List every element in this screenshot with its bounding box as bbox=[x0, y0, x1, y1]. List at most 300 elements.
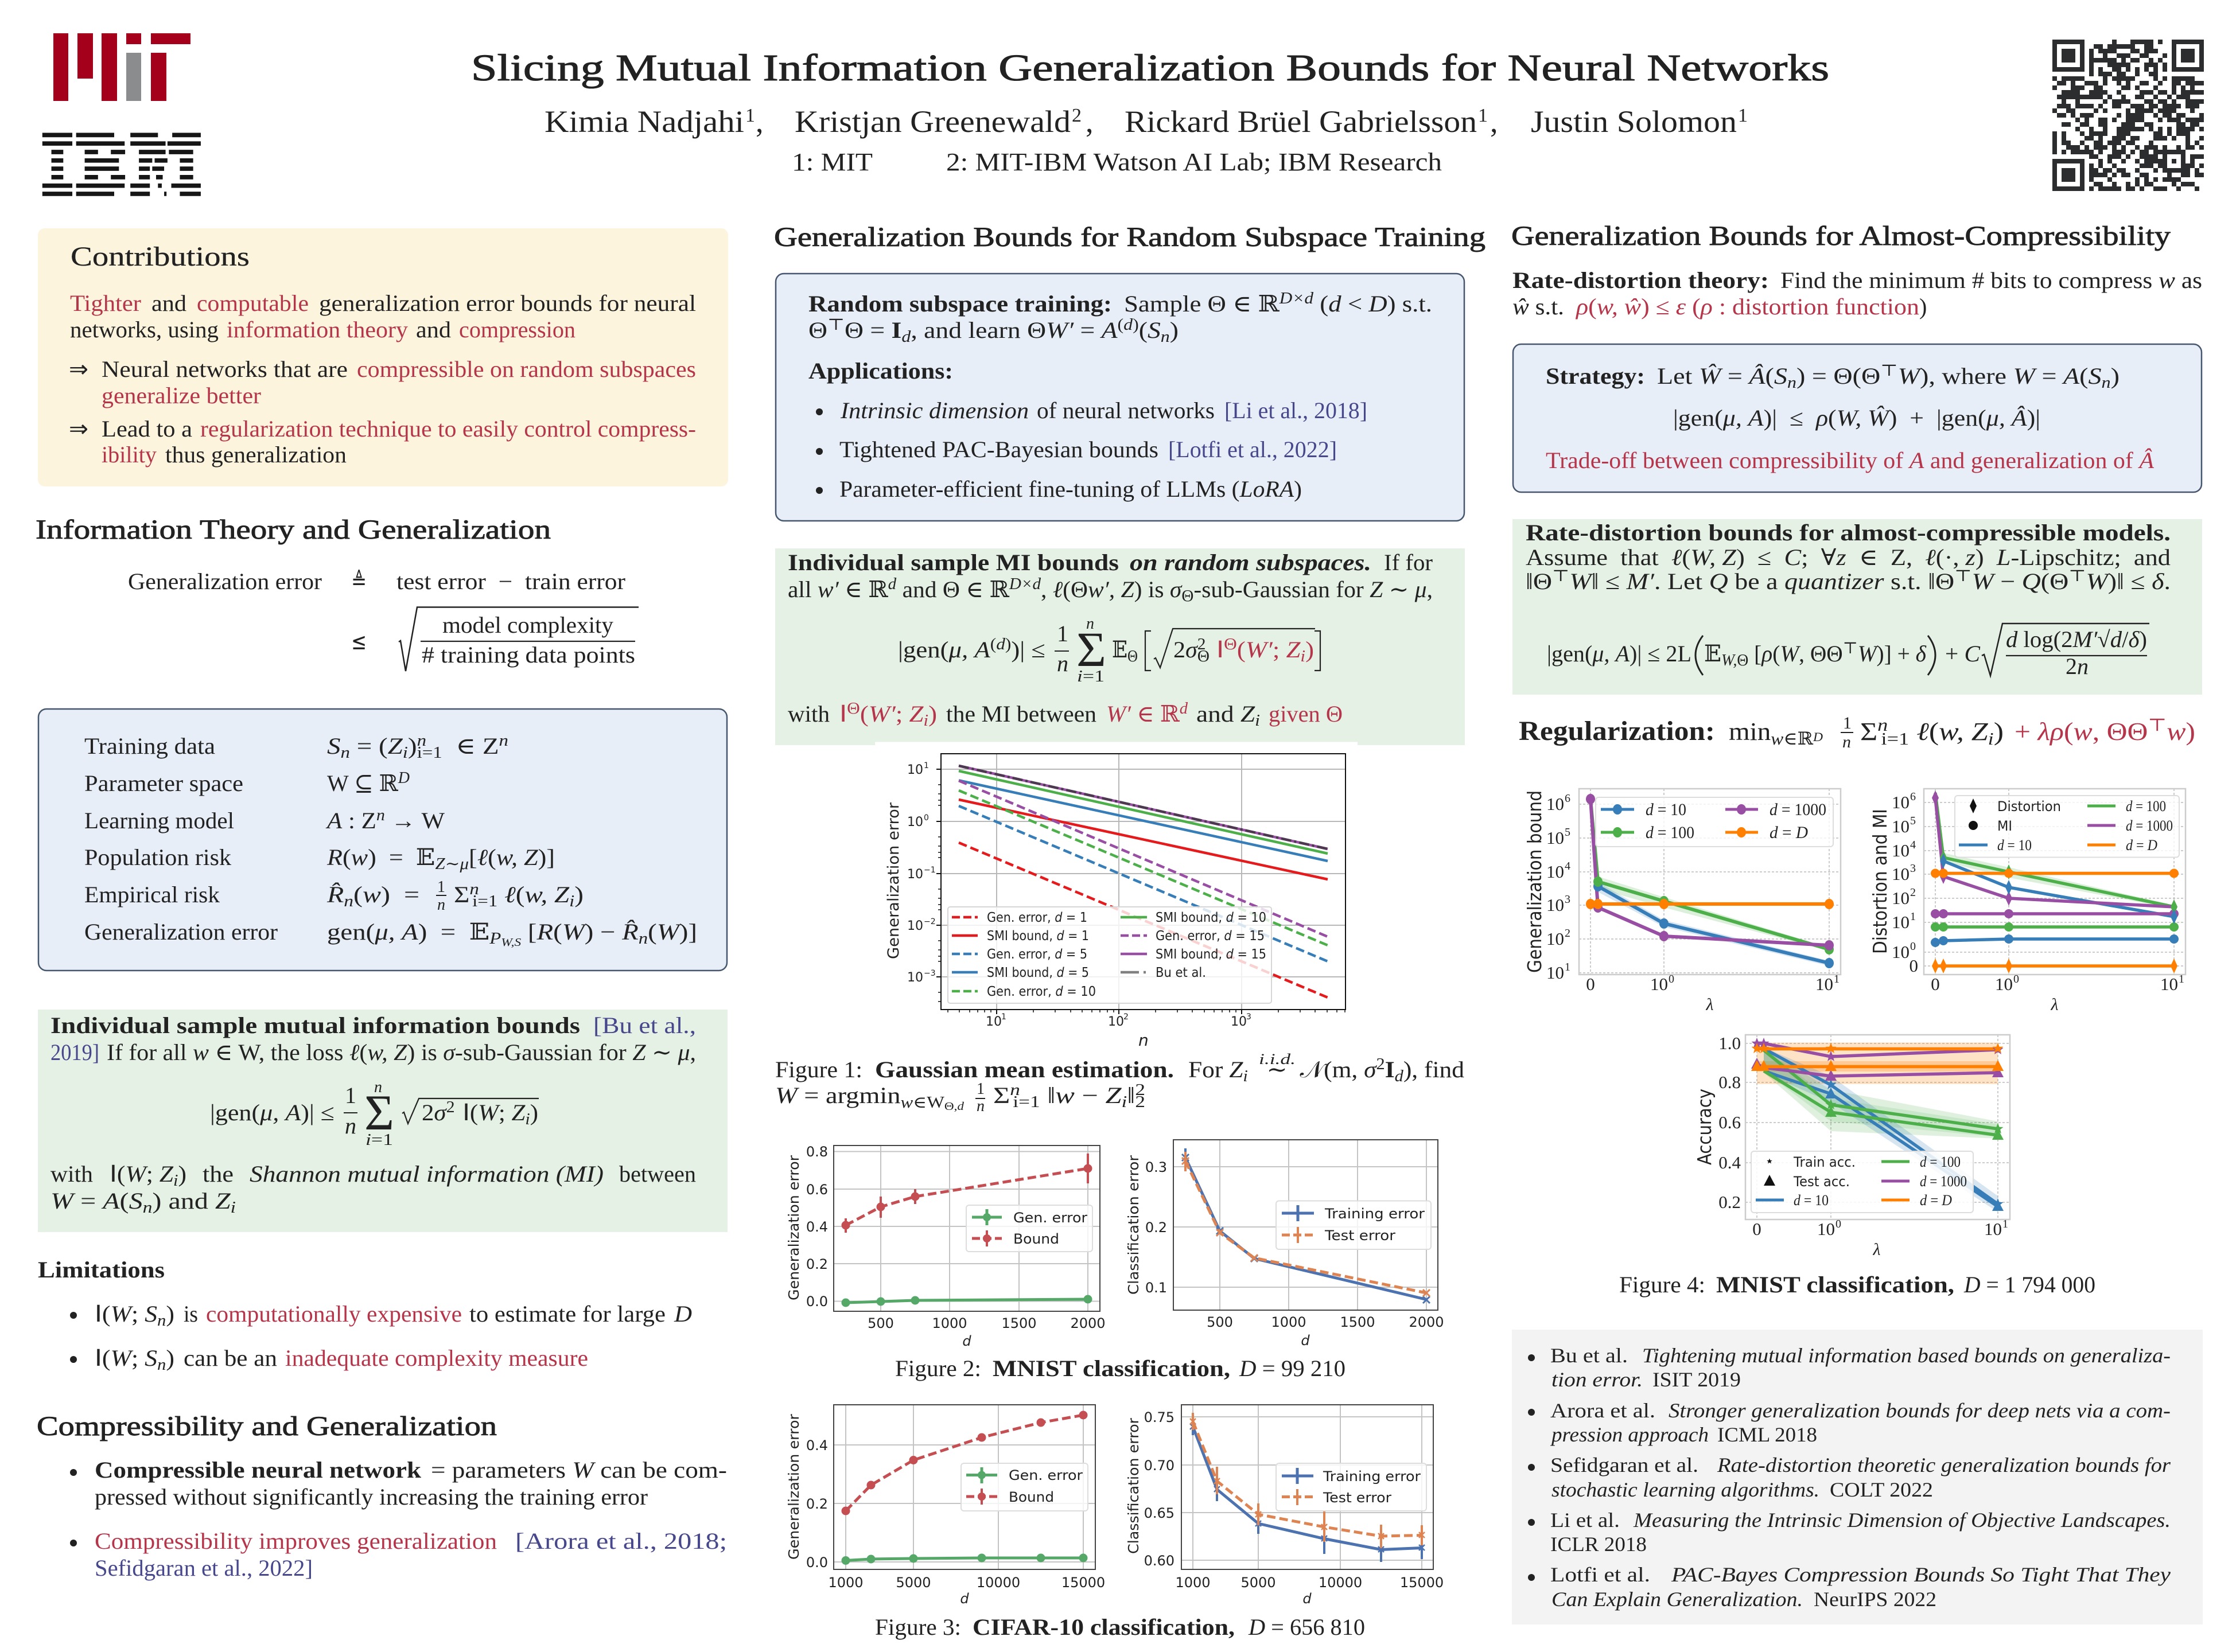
legend: Train acc. bbox=[1793, 1154, 1856, 1170]
heading: regularization: n bbox=[1842, 733, 1851, 751]
definition formulas: R(w) = 𝔼 bbox=[327, 844, 429, 870]
formula: rate-distortion bound: ρ(W, ΘΘ bbox=[1761, 641, 1844, 667]
theorem text: Assume that ℓ(W, Z) ≤ C; ∀z ∈ Z, ℓ(·, z) L-Lipschitz; and bbox=[1526, 544, 2171, 570]
panel: rate-distortion bounds bbox=[1512, 519, 2202, 695]
logo: MIT bbox=[53, 33, 190, 101]
section: compressibility and generalization bbox=[37, 1411, 727, 1581]
formula: subspace MI bound: 2 bbox=[1197, 636, 1205, 653]
equation: generalization error: model complexity bbox=[442, 612, 613, 638]
data lines bbox=[959, 766, 1328, 998]
applications list: Tightened PAC-Bayesian bounds bbox=[839, 437, 1158, 462]
text: rate-distortion theory: ) bbox=[1919, 294, 1927, 320]
theorem remark: ) and bbox=[152, 1188, 215, 1214]
formula: subspace MI bound: Θ bbox=[1127, 648, 1138, 665]
tick labels: 10 bbox=[1892, 942, 1910, 962]
test error line bbox=[1182, 1152, 1430, 1296]
definition text: d) bbox=[1123, 316, 1138, 334]
authors: 1 bbox=[745, 105, 755, 126]
strategy text: n bbox=[1787, 374, 1796, 392]
formula: rate-distortion bound: |gen(μ, A)| ≤ 2L bbox=[1547, 641, 1691, 667]
tick labels: 0.4 bbox=[806, 1219, 828, 1235]
theorem remark: d bbox=[1180, 700, 1188, 718]
contributions text: and bbox=[416, 317, 451, 342]
applications list: [Li et al., 2018] bbox=[1224, 398, 1367, 423]
caption: figure 1: W = argmin bbox=[775, 1082, 886, 1108]
reference: Arora et al.: pression approach bbox=[1550, 1423, 1709, 1446]
contributions text: computable bbox=[197, 290, 309, 316]
theorem text: d bbox=[888, 575, 897, 593]
tick labels: 2 bbox=[1910, 886, 1916, 899]
y axis label: Generalization bound bbox=[1523, 790, 1546, 973]
legend: Bound bbox=[1013, 1231, 1059, 1247]
caption: figure 1: 1 bbox=[977, 1080, 985, 1098]
caption: figure 1: For Z bbox=[1188, 1057, 1242, 1082]
x axis label: n bbox=[1138, 1031, 1149, 1050]
bound line bbox=[842, 1411, 1087, 1515]
caption: figure 1: Σ bbox=[993, 1082, 1006, 1108]
authors: , bbox=[756, 104, 763, 139]
bullet: compressible neural network: pressed without significantly increasing the training error bbox=[95, 1484, 648, 1510]
tick labels: 0.75 bbox=[1144, 1409, 1175, 1425]
theorem text: Z ∼ μ, bbox=[1370, 576, 1433, 602]
legend: d = D bbox=[2126, 837, 2157, 854]
QR code bbox=[2052, 40, 2204, 191]
caption: figure 1: Θ, bbox=[944, 1100, 957, 1113]
theorem remark: I bbox=[839, 701, 847, 727]
theorem remark: I(W; Z bbox=[110, 1161, 172, 1187]
contributions text: generalize better bbox=[102, 383, 261, 408]
panel: individual sample MI bounds bbox=[38, 1010, 728, 1232]
tick labels: 0.0 bbox=[806, 1293, 828, 1310]
series markers bbox=[1931, 790, 2179, 973]
formula: MI bound: i bbox=[525, 1111, 530, 1128]
tick labels: 10 bbox=[907, 867, 923, 882]
tick labels: 10 bbox=[1546, 794, 1564, 814]
authors: , bbox=[1490, 104, 1498, 139]
tick labels: 10 bbox=[1546, 862, 1564, 882]
definition formulas: n bbox=[469, 880, 479, 898]
contributions text: thus generalization bbox=[165, 442, 347, 467]
tick labels: 0 bbox=[1910, 956, 1918, 976]
y axis label: Generalization error bbox=[785, 1155, 802, 1300]
bullet: compressibility improves generalization: [Arora et al., 2018; bbox=[515, 1528, 727, 1554]
x axis label: λ bbox=[1705, 995, 1713, 1014]
reference: Arora et al.: ICML 2018 bbox=[1717, 1423, 1817, 1446]
tick labels: 0.0 bbox=[806, 1554, 828, 1571]
legend: Gen. error, d = 5 bbox=[987, 947, 1087, 962]
definition formulas: ℓ(w, Z bbox=[504, 882, 562, 907]
formula: subspace MI bound: Θ bbox=[1224, 636, 1237, 653]
heading: regularization: w bbox=[2167, 718, 2186, 746]
legend: MI bbox=[1997, 818, 2012, 834]
caption: figure 1: w bbox=[901, 1094, 913, 1112]
tick labels: 10000 bbox=[977, 1575, 1020, 1591]
definition labels: Training data bbox=[84, 733, 215, 759]
bullet: compressibility improves generalization: Sefidgaran et al., 2022] bbox=[95, 1555, 313, 1581]
limitation 2: I(W; S bbox=[95, 1345, 156, 1372]
definition labels: Empirical risk bbox=[84, 882, 220, 907]
caption: figure 1: Figure 1: bbox=[775, 1057, 862, 1082]
definition formulas: ) bbox=[574, 882, 584, 907]
strategy text: ), where W = A(S bbox=[1920, 363, 2099, 389]
tick labels: 10 bbox=[1817, 1219, 1835, 1239]
definition text: W′ = A bbox=[1046, 317, 1115, 343]
theorem text: ℓ(Θw′, Z) is σ bbox=[1053, 576, 1181, 602]
limitation 1: D bbox=[674, 1301, 692, 1327]
theorem remark: with bbox=[788, 701, 830, 727]
tick labels: 0 bbox=[2013, 973, 2019, 985]
tick labels: 10 bbox=[1546, 963, 1564, 983]
theorem text: ‖Θ bbox=[1526, 568, 1549, 594]
tick labels: 10 bbox=[1892, 912, 1910, 932]
theorem remark: and Z bbox=[1196, 701, 1253, 727]
definition formulas: S bbox=[327, 733, 341, 759]
legend: d = 100 bbox=[1646, 823, 1694, 842]
definition formulas: Z∼μ bbox=[435, 855, 469, 873]
tick labels: 0.60 bbox=[1144, 1553, 1175, 1569]
authors: 2 bbox=[1072, 105, 1082, 126]
tick labels: 0 bbox=[1586, 974, 1595, 994]
formula: rate-distortion bound: ⊤ bbox=[1843, 640, 1858, 657]
definition formulas: 1 bbox=[437, 878, 445, 896]
theorem remark: given Θ bbox=[1269, 701, 1343, 727]
heading: random subspace training: Generalization Bounds for Random Subspace Training bbox=[774, 222, 1485, 252]
definition formulas: n bbox=[344, 893, 353, 910]
formula: MI bound: (W; Z bbox=[470, 1100, 524, 1125]
equation: generalization error: ≜ bbox=[351, 568, 367, 595]
formula: MI bound: I bbox=[455, 1100, 470, 1126]
definition text: Sample Θ ∈ ℝ bbox=[1124, 291, 1263, 317]
tick labels: 1 bbox=[2179, 973, 2184, 985]
tick labels: 500 bbox=[1207, 1314, 1233, 1330]
tick labels: 10 bbox=[907, 919, 923, 933]
tick labels: 1 bbox=[2002, 1218, 2008, 1230]
definition formulas: [ bbox=[469, 844, 477, 870]
bullet: compressibility improves generalization: Compressibility improves generalization bbox=[95, 1528, 497, 1554]
reference: Bu et al.: ISIT 2019 bbox=[1652, 1368, 1741, 1391]
definition labels: Parameter space bbox=[84, 770, 243, 796]
tick labels: 10 bbox=[1984, 1219, 2002, 1239]
reference: Sefidgaran et al.: Rate-distortion theoretic generalization bounds for bbox=[1717, 1454, 2171, 1476]
tick labels: 0.4 bbox=[806, 1437, 828, 1454]
tick labels: 0.2 bbox=[806, 1496, 828, 1512]
applications heading: Applications: bbox=[808, 358, 953, 384]
definition formulas: n bbox=[437, 896, 445, 914]
limitation 2: ) bbox=[166, 1345, 174, 1371]
legend: Training error bbox=[1324, 1206, 1425, 1222]
caption: figure 1: 2 bbox=[1376, 1055, 1385, 1073]
tick labels: 10 bbox=[1546, 828, 1564, 848]
legend: SMI bound, d = 5 bbox=[987, 965, 1089, 980]
reference: Lotfi et al.: NeurIPS 2022 bbox=[1814, 1588, 1936, 1611]
panel: strategy bbox=[1513, 344, 2202, 492]
definition text: n bbox=[1161, 328, 1170, 346]
tick labels: 10 bbox=[907, 971, 923, 985]
text: rate-distortion theory: Find the minimum # bits to compress w as bbox=[1780, 267, 2202, 293]
limitation 1: is bbox=[184, 1301, 198, 1327]
theorem text: Θ bbox=[1181, 587, 1193, 605]
caption: figure 1: σ bbox=[1364, 1057, 1377, 1082]
tick labels: 500 bbox=[868, 1315, 894, 1331]
formula: rate-distortion bound: W, bbox=[1721, 652, 1737, 669]
tick labels: 5000 bbox=[1240, 1575, 1276, 1591]
tick labels: 6 bbox=[1910, 790, 1916, 803]
panel: references bbox=[1512, 1330, 2203, 1624]
definition formulas: W ⊆ ℝ bbox=[327, 770, 398, 796]
tick labels bbox=[1718, 1033, 2008, 1239]
tick labels: 10 bbox=[1231, 1015, 1247, 1029]
theorem text: Individual sample MI bounds bbox=[788, 550, 1119, 575]
tick labels bbox=[1145, 1159, 1444, 1330]
formula: rate-distortion bound: [ bbox=[1748, 641, 1761, 667]
heading: regularization: 1 bbox=[1843, 714, 1852, 733]
chart: figure 1 Gaussian mean estimation bbox=[885, 754, 1345, 1050]
definition labels: Population risk bbox=[84, 844, 231, 870]
strategy text: ) = Θ(Θ bbox=[1796, 363, 1880, 389]
definition formulas: n bbox=[376, 806, 385, 824]
legend: Training error bbox=[1323, 1468, 1421, 1485]
theorem text: Individual sample mutual information bounds bbox=[50, 1012, 580, 1038]
legend bbox=[1955, 796, 2179, 857]
definition formulas: R̂ bbox=[326, 882, 344, 907]
legend: SMI bound, d = 1 bbox=[987, 929, 1089, 944]
x axis label: λ bbox=[2051, 995, 2059, 1014]
heading: regularization: Regularization: bbox=[1519, 716, 1715, 746]
theorem text: , bbox=[1041, 576, 1053, 602]
tick labels: 5000 bbox=[896, 1575, 931, 1591]
tick labels: 0 bbox=[1669, 973, 1674, 985]
equation: generalization error: test error − train error bbox=[396, 568, 625, 594]
heading: regularization: w bbox=[1771, 729, 1784, 749]
tick labels bbox=[806, 1144, 1106, 1331]
limitation 2 bbox=[70, 1345, 588, 1374]
caption: figure 1: I bbox=[1385, 1057, 1395, 1082]
applications list: of neural networks bbox=[1037, 398, 1215, 423]
definition formulas: i=1 bbox=[417, 744, 442, 762]
text: rate-distortion theory bbox=[1512, 267, 2202, 320]
formula: MI bound: i=1 bbox=[365, 1131, 393, 1149]
x axis label: d bbox=[1301, 1332, 1310, 1349]
caption: figure 2 bbox=[895, 1355, 1345, 1381]
tick labels: 10 bbox=[907, 763, 923, 777]
tick labels: 3 bbox=[1565, 893, 1570, 906]
affiliations: 2: MIT-IBM Watson AI Lab; IBM Research bbox=[946, 148, 1442, 176]
limitation 1: n bbox=[157, 1312, 166, 1330]
chart: figure 2 MNIST classification error bbox=[1125, 1140, 1444, 1349]
tick labels: 1000 bbox=[1271, 1314, 1306, 1330]
tick labels: 10 bbox=[1892, 888, 1910, 908]
formula: subspace MI bound: i=1 bbox=[1077, 668, 1105, 685]
formula: rate-distortion bound: 𝔼 bbox=[1704, 641, 1721, 667]
formula: subspace MI bound: I bbox=[1216, 637, 1224, 663]
heading: regularization: n bbox=[1877, 715, 1888, 735]
tick labels bbox=[1546, 792, 1840, 994]
legend: Gen. error bbox=[1009, 1467, 1083, 1483]
theorem text: )‖ ≤ δ. bbox=[2108, 568, 2170, 594]
tick labels: 0 bbox=[1835, 1218, 1841, 1230]
legend: d = 1000 bbox=[1770, 800, 1826, 819]
reference: Li et al.: Li et al. bbox=[1550, 1509, 1620, 1532]
theorem text: ⊤ bbox=[1552, 567, 1569, 585]
formula: subspace MI bound: ( bbox=[990, 636, 996, 653]
caption: figure 1: d bbox=[1395, 1067, 1404, 1085]
definition formulas: D bbox=[398, 769, 410, 787]
tick labels bbox=[1144, 1409, 1444, 1591]
affiliations: 1: MIT bbox=[792, 148, 873, 176]
definition formulas: ( bbox=[648, 919, 657, 945]
confidence bands bbox=[1598, 876, 1829, 966]
formula: subspace MI bound: 1 bbox=[1057, 621, 1068, 646]
chart: figure 4 generalization bound bbox=[1523, 789, 1841, 1014]
formula: rate-distortion bound: 2n bbox=[2066, 653, 2089, 679]
y axis label: Generalization error bbox=[885, 802, 903, 959]
tick labels: 2000 bbox=[1070, 1315, 1106, 1331]
heading: regularization: i bbox=[1988, 729, 1994, 749]
theorem remark: ) bbox=[178, 1161, 186, 1187]
contributions text: networks, using bbox=[70, 317, 219, 342]
panel: definitions bbox=[38, 709, 727, 971]
authors bbox=[545, 104, 1748, 139]
theorem remark: W′ ∈ ℝ bbox=[1106, 701, 1179, 727]
series lines bbox=[1590, 799, 1829, 963]
legend: Test error bbox=[1323, 1490, 1391, 1506]
theorem text: D×d bbox=[1009, 575, 1041, 593]
limitation 2: can be an bbox=[184, 1345, 277, 1371]
legend bbox=[1276, 1463, 1426, 1511]
caption: figure 1: ∼ 𝒩(m, bbox=[1248, 1057, 1364, 1082]
heading: regularization: min bbox=[1729, 718, 1768, 746]
reference: Li et al.: Measuring the Intrinsic Dimension of Objective Landscapes. bbox=[1633, 1509, 2171, 1532]
theorem text bbox=[50, 1012, 696, 1065]
definition labels: Learning model bbox=[84, 808, 234, 833]
tick labels: 1 bbox=[1910, 910, 1916, 923]
theorem remark: Shannon mutual information (MI) bbox=[250, 1161, 604, 1187]
contributions text: compression bbox=[459, 317, 575, 342]
theorem text: all w′ ∈ ℝ bbox=[788, 576, 886, 602]
tick labels: 10 bbox=[1892, 816, 1910, 836]
reference: Li et al.: ICLR 2018 bbox=[1550, 1533, 1647, 1556]
definition text: ( bbox=[1139, 317, 1148, 343]
formula: MI bound: n bbox=[345, 1113, 356, 1139]
legend: d = D bbox=[1920, 1192, 1952, 1209]
heading: almost-compressibility: Generalization Bounds for Almost-Compressibility bbox=[1511, 221, 2171, 251]
tick labels: 1500 bbox=[1340, 1314, 1375, 1330]
caption: figure 3: CIFAR-10 classification, bbox=[973, 1614, 1235, 1640]
formula: subspace MI bound: 𝔼 bbox=[1112, 637, 1129, 663]
legend: Gen. error bbox=[1013, 1210, 1087, 1226]
caption: figure 1: i.i.d. bbox=[1259, 1051, 1296, 1067]
tick labels: 5 bbox=[1565, 826, 1570, 839]
chart: figure 4 accuracy bbox=[1693, 1033, 2010, 1259]
theorem remark: i bbox=[1255, 712, 1260, 730]
definition text: ⊤ bbox=[827, 316, 845, 334]
definition formulas: gen( μ, A ) = 𝔼 bbox=[327, 919, 479, 945]
caption: figure 1: d bbox=[957, 1100, 965, 1113]
formula: rate-distortion bound bbox=[1547, 624, 2149, 679]
tick labels: 15000 bbox=[1061, 1575, 1105, 1591]
tick labels: 10 bbox=[2160, 974, 2178, 994]
title: Slicing Mutual Information Generalization Bounds for Neural Networks bbox=[471, 47, 1829, 89]
contributions text: Lead to a bbox=[102, 416, 192, 442]
definition formulas: ℓ(w, Z)] bbox=[477, 844, 553, 870]
series lines bbox=[1757, 1043, 1998, 1207]
tick labels: 10 bbox=[986, 1015, 1002, 1029]
tick labels: 0.65 bbox=[1144, 1505, 1175, 1521]
chart: figure 4 distortion and MI bbox=[1869, 789, 2185, 1014]
reference: Bu et al.: Tightening mutual information based bounds on generaliza- bbox=[1642, 1344, 2171, 1367]
formula: subspace MI bound: 2σ bbox=[1173, 637, 1197, 663]
definition formulas bbox=[325, 732, 697, 949]
legend bbox=[948, 907, 1271, 1003]
caption: figure 1: ‖ bbox=[1127, 1082, 1135, 1108]
gen error line bbox=[842, 1295, 1092, 1307]
formula: MI bound: n bbox=[374, 1078, 382, 1096]
definition text: ) bbox=[1170, 317, 1179, 343]
caption: figure 3 bbox=[875, 1614, 1365, 1640]
definition text: D×d bbox=[1279, 290, 1314, 307]
definition formulas: n bbox=[341, 744, 350, 762]
tick labels: 0 bbox=[1752, 1219, 1761, 1239]
formula: subspace MI bound: ( bbox=[1237, 637, 1246, 663]
definition text: d bbox=[901, 328, 911, 346]
tick labels bbox=[907, 761, 1251, 1029]
formula: subspace MI bound: Σ bbox=[1076, 622, 1106, 677]
tick labels: 10 bbox=[1892, 840, 1910, 860]
confidence band bbox=[1943, 853, 2174, 909]
formula: MI bound: Σ bbox=[364, 1085, 394, 1141]
limitation 1: to estimate for large bbox=[469, 1301, 666, 1327]
formula: subspace MI bound: |gen(μ, A bbox=[898, 637, 986, 663]
equation: generalization error: Generalization error bbox=[128, 568, 322, 594]
caption: figure 3: D = 656 810 bbox=[1248, 1614, 1365, 1640]
tick labels: 0.70 bbox=[1144, 1458, 1175, 1474]
strategy text: Let Ŵ = Â(S bbox=[1657, 363, 1786, 389]
legend: Test acc. bbox=[1793, 1174, 1850, 1190]
theorem text: and Θ ∈ ℝ bbox=[896, 576, 1010, 602]
tick labels: 15000 bbox=[1400, 1575, 1444, 1591]
contributions text: ⇒ bbox=[69, 356, 88, 383]
definition formulas: ∈ Z bbox=[442, 733, 499, 759]
chart: figure 3 CIFAR-10 generalization error bbox=[785, 1405, 1105, 1607]
definition text: S bbox=[1148, 317, 1161, 343]
chart: figure 2 MNIST generalization error bbox=[785, 1144, 1106, 1349]
legend: d = D bbox=[1770, 823, 1808, 842]
heading: regularization: Σ bbox=[1860, 718, 1875, 746]
tick labels: 4 bbox=[1910, 839, 1916, 851]
formula: MI bound: 2σ bbox=[422, 1100, 445, 1125]
tick labels: 1 bbox=[1834, 973, 1840, 985]
heading: regularization: ∈ℝ bbox=[1783, 729, 1813, 749]
formula: subspace MI bound: Θ bbox=[1197, 648, 1210, 665]
series markers bbox=[1586, 794, 1834, 968]
tick labels: 1.0 bbox=[1718, 1033, 1741, 1053]
formula: subspace MI bound: W′; Z bbox=[1246, 637, 1299, 663]
authors: Kimia Nadjahi bbox=[545, 104, 744, 139]
reference: Lotfi et al.: Can Explain Generalization. bbox=[1551, 1588, 1803, 1611]
heading: regularization: D bbox=[1813, 730, 1823, 744]
legend bbox=[1751, 1151, 1973, 1213]
theorem remark: i bbox=[923, 712, 928, 730]
tick labels: 0.4 bbox=[1718, 1152, 1741, 1172]
gen error line bbox=[842, 1554, 1087, 1565]
bound line bbox=[842, 1154, 1092, 1233]
definition text: I bbox=[892, 317, 901, 343]
legend: d = 100 bbox=[1920, 1154, 1961, 1170]
theorem remark: Θ bbox=[847, 700, 860, 718]
heading: regularization: ⊤ bbox=[2148, 715, 2167, 735]
definition formulas: [ bbox=[521, 919, 537, 945]
training error line bbox=[1190, 1423, 1425, 1562]
